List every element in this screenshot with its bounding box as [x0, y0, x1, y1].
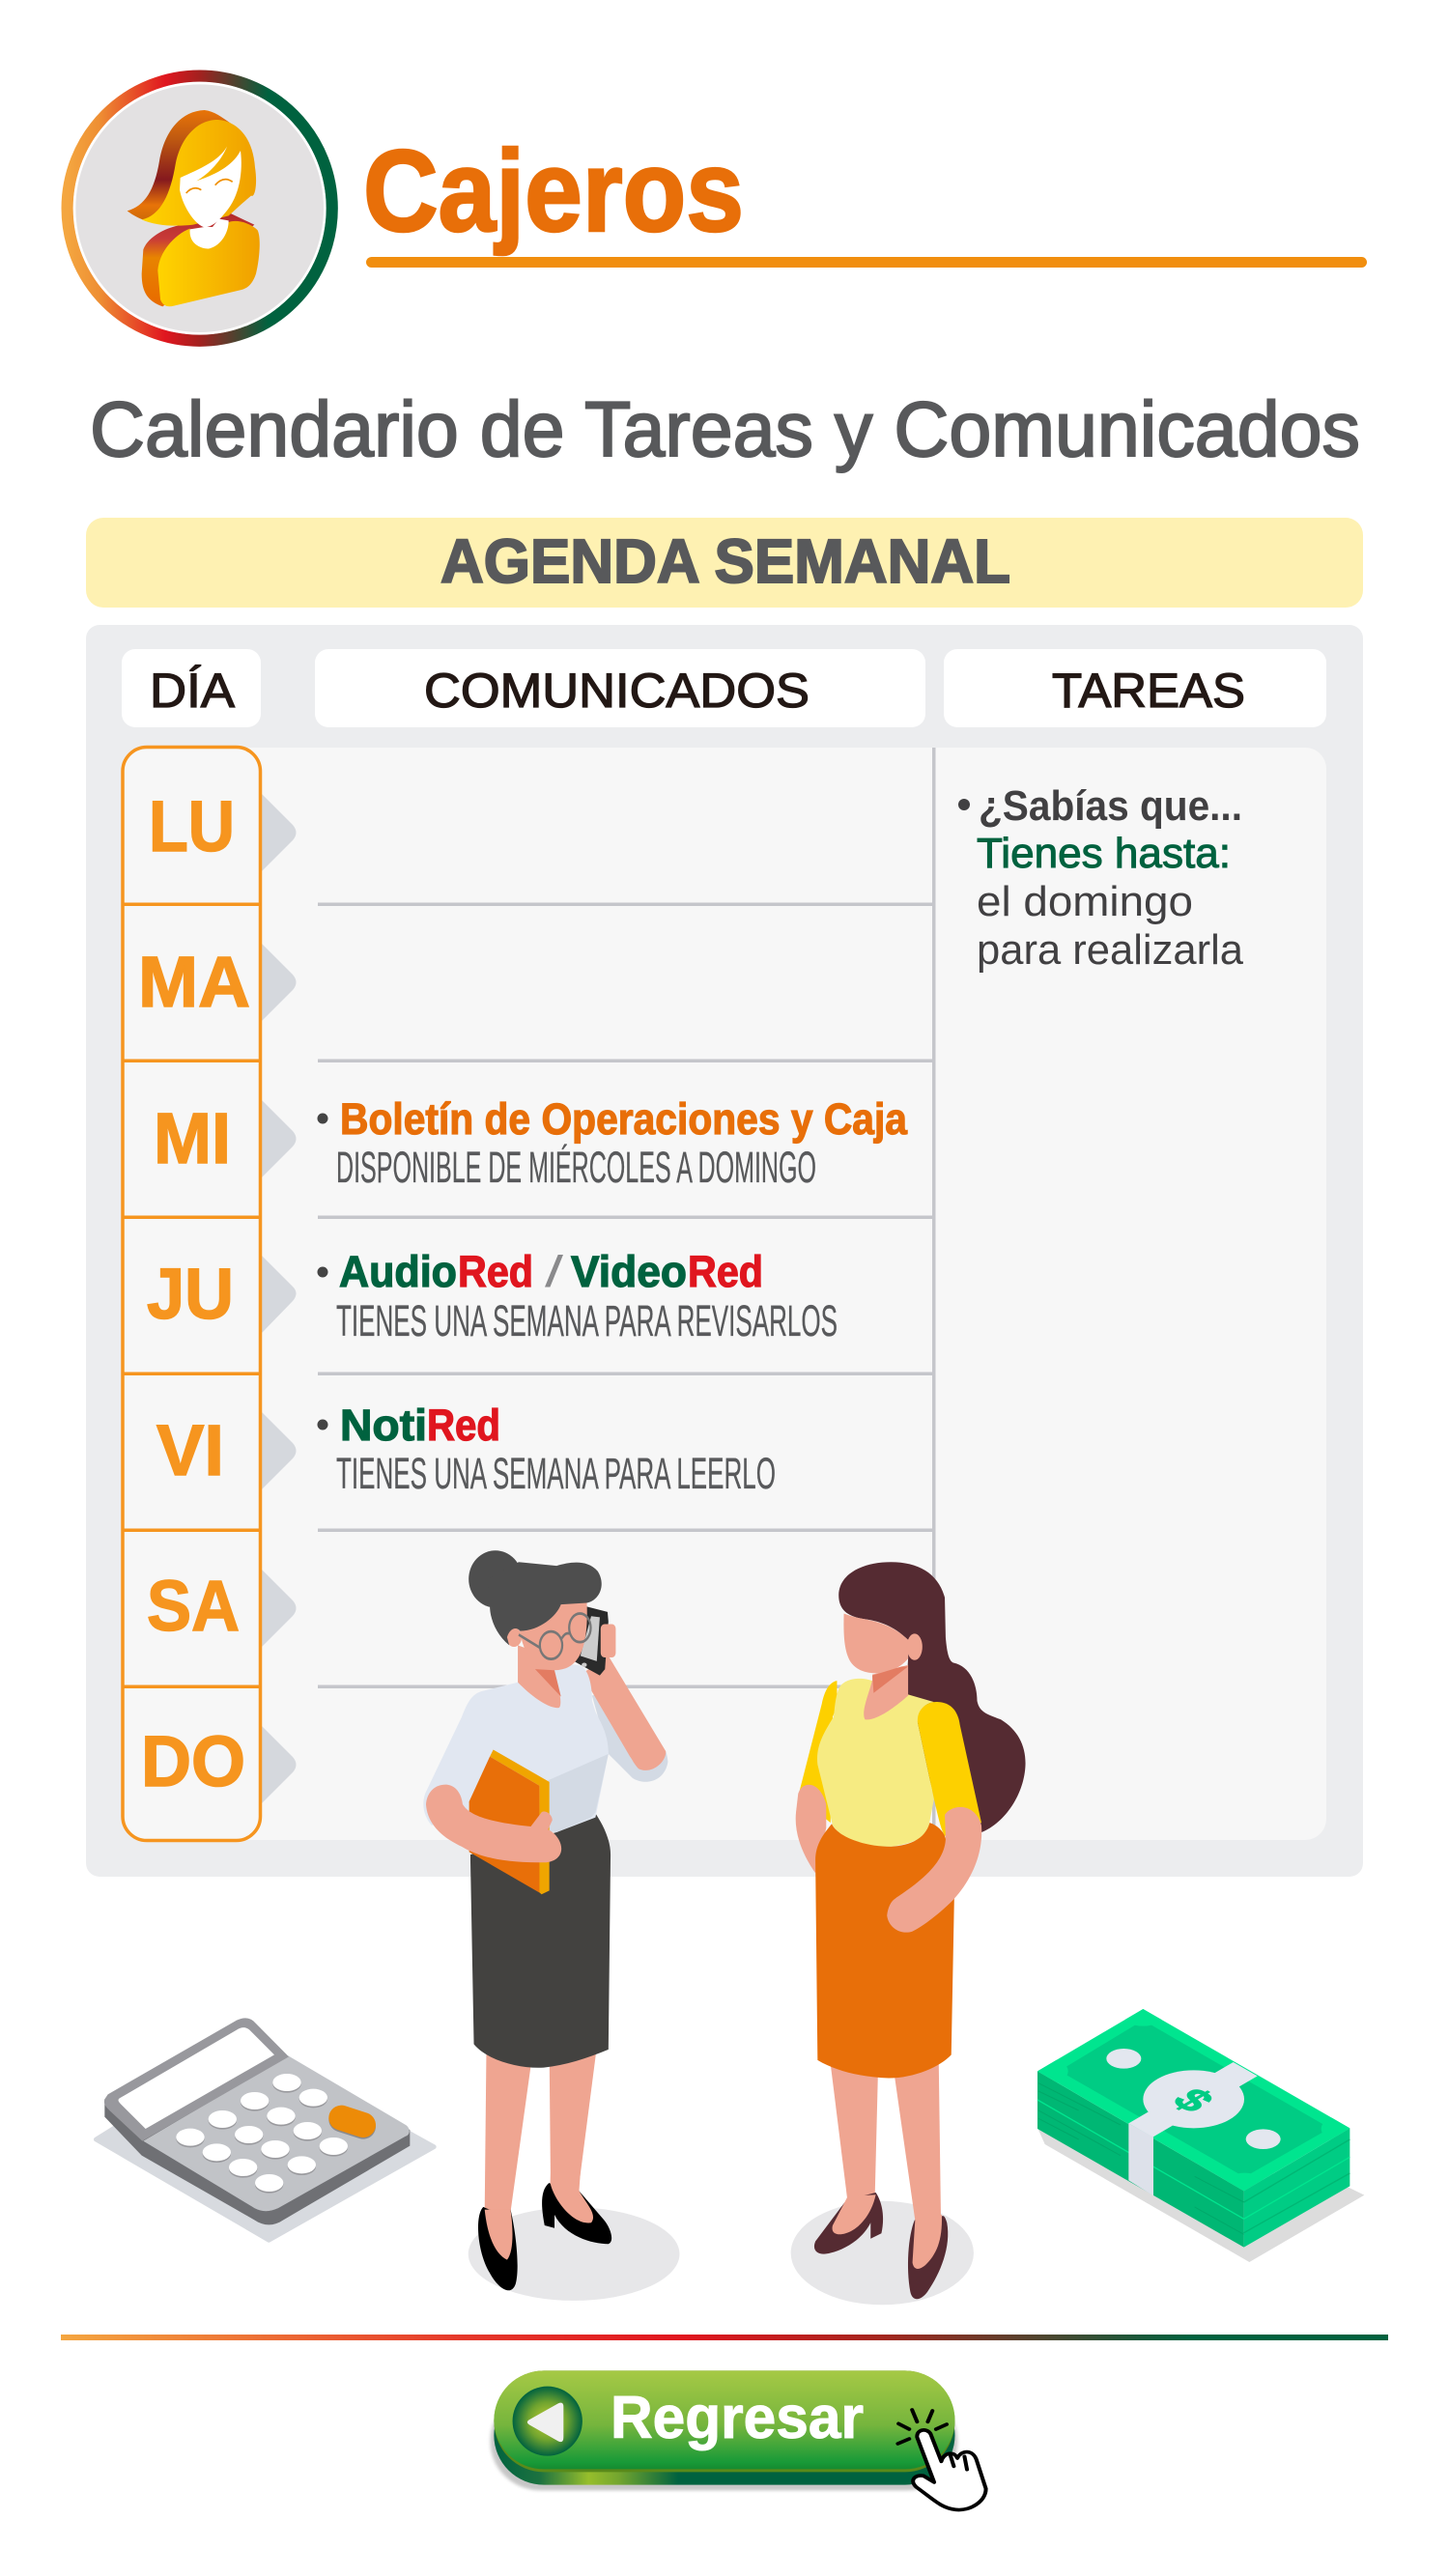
panel: weekly agenda table background — [86, 625, 1363, 1877]
text block: notired — [317, 1401, 776, 1498]
subtitle: Calendario de Tareas y Comunicados — [90, 386, 1360, 473]
day: domingo: DO — [141, 1721, 245, 1801]
banner: agenda semanal — [86, 518, 1363, 608]
text block: boletín de operaciones y caja: Boletín de Operaciones y Caja — [340, 1094, 908, 1144]
text block: notired: Red — [427, 1401, 500, 1450]
text block: tareas: el domingo — [977, 878, 1193, 925]
text block: notired: Noti — [340, 1401, 427, 1450]
icon: pointing hand — [897, 2410, 986, 2510]
day: jueves: JU — [147, 1254, 234, 1334]
text block: boletín de operaciones y caja — [317, 1094, 908, 1192]
illustration: calculator — [96, 2018, 434, 2240]
button: regresar — [491, 2370, 986, 2510]
text block: audiored / videored: Red — [688, 1247, 763, 1296]
text block: audiored / videored: / — [545, 1247, 564, 1296]
panel: table body — [122, 748, 1326, 1840]
day: lunes: LU — [149, 786, 235, 866]
day: martes: MA — [138, 942, 250, 1022]
text block: audiored / videored — [317, 1247, 838, 1345]
text block: tareas — [958, 782, 1244, 974]
text block: audiored / videored: Red — [458, 1247, 533, 1296]
title: Cajeros — [363, 127, 744, 256]
text block: tareas: para realizarla — [977, 926, 1244, 974]
text block: tareas: Tienes hasta: — [977, 830, 1231, 877]
illustration: stack of banknotes — [1028, 2001, 1364, 2262]
column header: comunicados — [315, 649, 925, 727]
text block: audiored / videored: TIENES UNA SEMANA PARA REVISARLOS — [336, 1296, 838, 1345]
text block: audiored / videored: Video — [571, 1247, 687, 1296]
day chevrons — [262, 794, 296, 1803]
text block: tareas: ¿Sabías que... — [979, 782, 1242, 830]
illustration: woman on the phone with folder — [423, 1550, 679, 2301]
column header: día: DÍA — [150, 664, 236, 718]
column header: día — [122, 649, 261, 727]
column header: tareas — [944, 649, 1326, 727]
banner: agenda semanal: AGENDA SEMANAL — [440, 526, 1010, 596]
column header: comunicados: COMUNICADOS — [424, 664, 810, 718]
button: regresar: Regresar — [611, 2385, 864, 2451]
day: viernes: VI — [156, 1410, 224, 1490]
day column — [123, 748, 261, 1841]
day: sábado: SA — [147, 1566, 240, 1646]
illustration: stack of banknotes: $ — [1162, 2081, 1225, 2118]
text block: notired: TIENES UNA SEMANA PARA LEERLO — [336, 1449, 776, 1498]
title underline — [366, 257, 1367, 268]
text block: audiored / videored: Audio — [339, 1247, 457, 1296]
gradient divider — [61, 2335, 1388, 2340]
column header: tareas: TAREAS — [1052, 664, 1245, 718]
icon: cashier avatar in gradient ring — [68, 76, 332, 341]
row dividers — [318, 748, 935, 1840]
day: miércoles: MI — [154, 1098, 231, 1178]
text block: boletín de operaciones y caja: DISPONIBLE DE MIÉRCOLES A DOMINGO — [336, 1143, 816, 1192]
illustration: woman in yellow blouse — [791, 1562, 1026, 2305]
